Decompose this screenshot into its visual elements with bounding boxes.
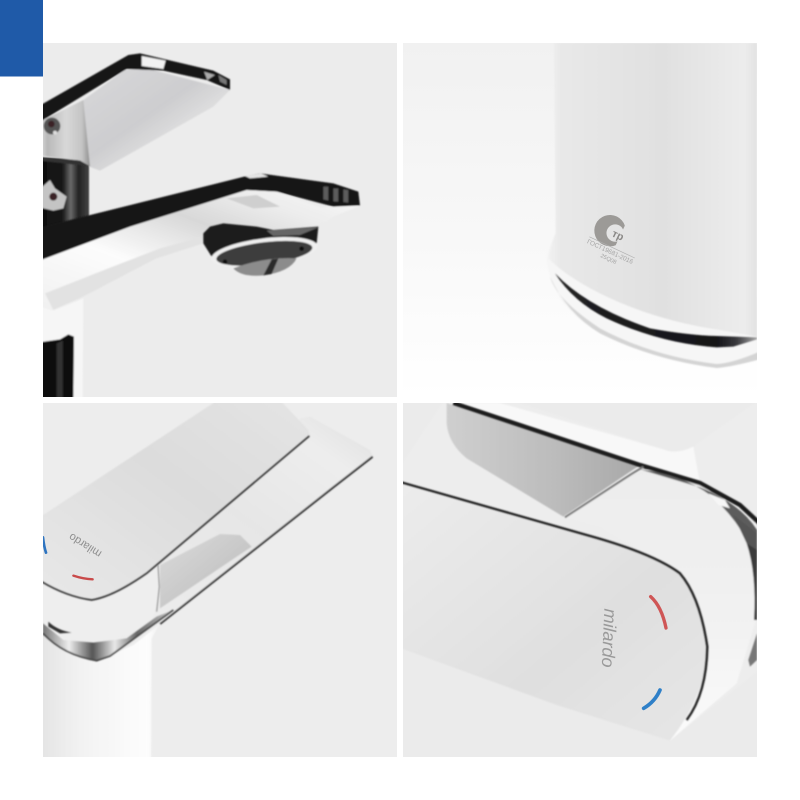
icon: face outline (397, 481, 707, 720)
icon: upper lever handle (37, 53, 230, 171)
panel: lever top view photo (43, 403, 397, 757)
icon: cylindrical faucet body (548, 43, 757, 337)
panel: lever close-up photo (403, 403, 757, 757)
icon: chrome collar (43, 610, 173, 662)
icon: lever side and chrome ring (453, 403, 763, 741)
icon: vertical sliver (157, 565, 159, 612)
text: batch code: 25Q08 (599, 253, 617, 266)
icon: hot mark (651, 597, 666, 628)
icon: spout band behind lever (397, 397, 763, 741)
text: brand name: milardo (67, 530, 104, 560)
icon: faucet stem (37, 623, 160, 763)
blue corner block (0, 0, 43, 76)
panel: base and certification mark photo (403, 43, 757, 368)
icon: lever body side (37, 564, 159, 638)
icon: cold mark (644, 690, 660, 708)
icon: faucet stem upper (37, 158, 89, 230)
text: standard number: ГОСТ19681-2016 (586, 238, 634, 266)
text: brand name: milardo (598, 608, 620, 668)
icon: faucet base plate (547, 233, 763, 368)
icon: cold mark (43, 537, 46, 553)
icon: aerator (203, 223, 319, 276)
icon: certification logo: тр (610, 228, 626, 244)
icon: recessed shadow (447, 403, 640, 517)
icon: dark reflective slit (555, 273, 757, 347)
icon: faucet stem lower (37, 298, 83, 403)
icon: certification logo (583, 210, 648, 272)
icon: spout (37, 417, 373, 660)
icon: lever top face (37, 397, 310, 600)
icon: lever top face (397, 481, 707, 741)
panel: spout and aerator photo (43, 43, 397, 397)
icon: face outline (42, 436, 309, 600)
icon: spout body (37, 173, 360, 311)
icon: hot mark (73, 576, 93, 579)
icon: bright band above stripe (453, 403, 700, 483)
